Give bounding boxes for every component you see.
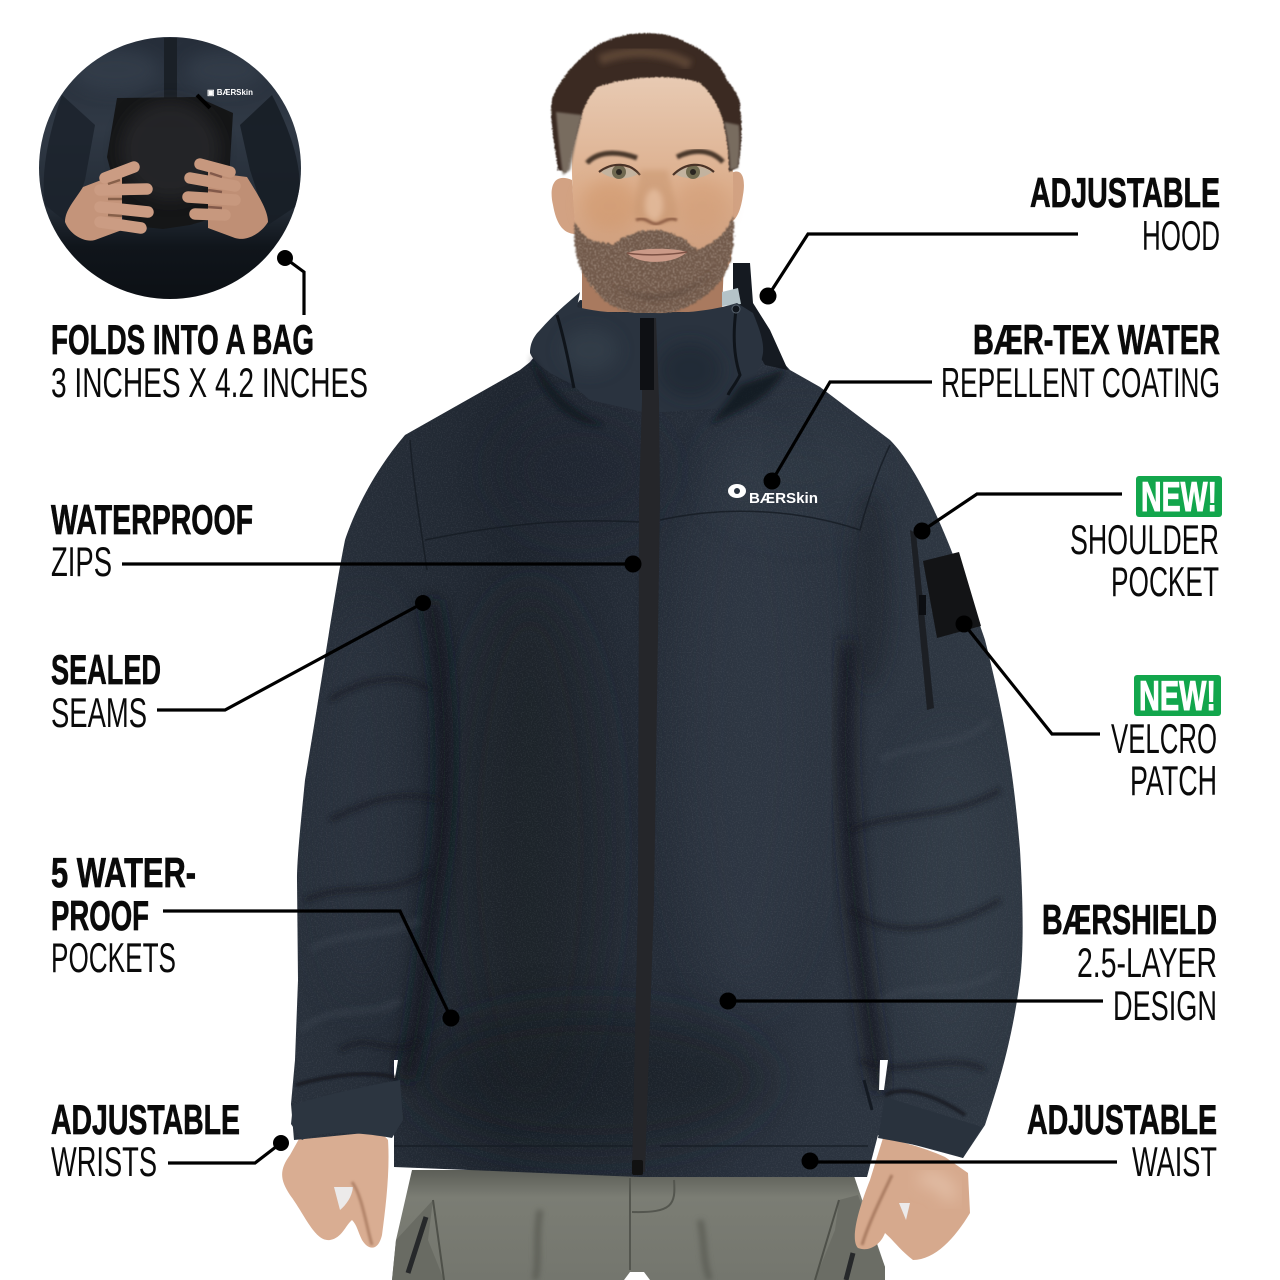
eyebrows [587,151,723,163]
badge: new: NEW! [1141,473,1217,520]
leader: waist [802,1152,1117,1170]
chest logo [728,484,818,507]
label: folds into a bag [51,316,368,406]
leader: shoulder pocket [914,494,1122,540]
label: sealed seams [51,646,161,736]
label: waterproof zips [51,496,253,585]
label: sealed seams: SEAMS [51,689,147,736]
label: adjustable hood [1030,169,1220,259]
hood and collar [530,263,788,425]
label: new shoulder pocket [1070,473,1222,605]
label: new velcro patch: PATCH [1130,757,1217,804]
label: baershield design [1042,896,1217,1029]
inset: folds into a bag [39,37,301,299]
side gaps at hem [394,1060,888,1090]
ears [552,172,744,234]
label: waterproof pockets: 5 WATER- [51,849,196,896]
label: waterproof pockets: PROOF [51,892,149,939]
left hand [282,1125,389,1248]
leader: layer design [720,992,1103,1010]
leader: waterproof zips [122,556,642,572]
hair [551,33,741,172]
leader: hood [760,234,1078,304]
leader: velcro patch [956,616,1100,734]
label: new velcro patch [1111,672,1221,804]
label: sealed seams: SEALED [51,646,161,693]
inset: folds into a bag: ▣ BÆRSkin [207,88,253,97]
right cuff [878,1091,982,1158]
chest logo: BÆRSkin [749,490,818,507]
label: water repellent coating [941,316,1220,406]
label: baershield design: DESIGN [1113,982,1217,1029]
neck and head [551,33,744,314]
eyes [601,166,712,178]
label: adjustable waist [1027,1096,1217,1185]
jacket body [291,300,1023,1177]
yoke and hem seams [394,440,890,1146]
label: adjustable wrists [51,1096,240,1185]
label: waterproof pockets [51,849,196,981]
leader: folds into a bag [277,250,304,315]
label: waterproof zips: WATERPROOF [51,496,253,543]
lips [627,249,687,262]
leader: coating [764,382,932,490]
label: folds into a bag: 3 INCHES X 4.2 INCHES [51,359,368,406]
shoulder pocket zip [910,530,934,710]
left cuff [291,1074,403,1140]
velcro patch [923,552,981,638]
model wearing jacket [282,33,1023,1280]
badge: new: NEW! [1139,672,1216,719]
label: new shoulder pocket: POCKET [1111,558,1219,605]
leader: sealed seams [157,595,431,710]
leader: wrists [168,1135,289,1163]
label: adjustable waist: WAIST [1132,1138,1217,1185]
badge: new [1136,473,1222,520]
inset left hand [65,167,148,241]
centre zip [632,318,660,1175]
right hand [855,1138,970,1260]
face [572,65,733,314]
label: adjustable wrists: WRISTS [51,1138,157,1185]
leader: pockets [163,911,460,1026]
label: adjustable hood: HOOD [1142,212,1220,259]
beard [574,215,734,314]
label: waterproof pockets: POCKETS [51,934,176,981]
label: waterproof zips: ZIPS [51,538,112,585]
nose [634,170,677,224]
label: folds into a bag: FOLDS INTO A BAG [51,316,314,363]
label: baershield design: 2.5-LAYER [1077,939,1217,986]
label: adjustable wrists: ADJUSTABLE [51,1096,240,1143]
pants [392,1170,885,1280]
label: new velcro patch: VELCRO [1111,715,1217,762]
inset right hand [188,164,268,239]
